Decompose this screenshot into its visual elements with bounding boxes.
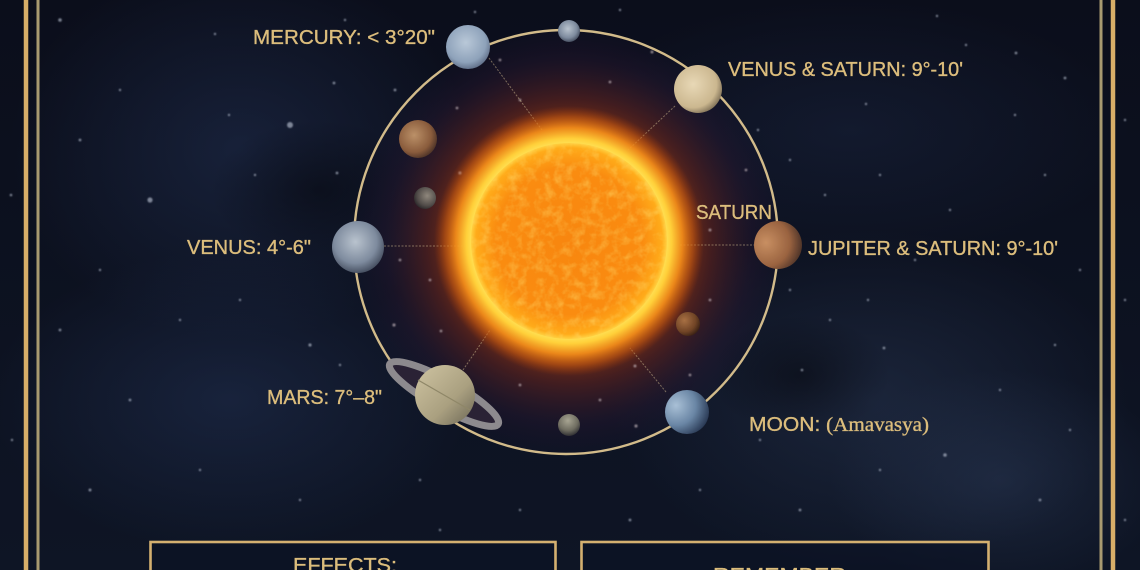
label: Moon: MOON: (Amavasya) — [749, 414, 929, 436]
planet: Mercury — [446, 25, 490, 69]
inner stars — [392, 50, 747, 428]
label: Venus and Saturn: VENUS & SATURN: 9°-10' — [728, 59, 963, 81]
label: Saturn: SATURN — [696, 202, 772, 224]
planet: Moon — [665, 390, 709, 434]
planets — [332, 20, 802, 436]
planet: Venus and Saturn — [674, 65, 722, 113]
panel: remember — [582, 542, 988, 570]
warm space inside orbit — [354, 30, 778, 454]
label: Venus: VENUS: 4°-6" — [187, 237, 311, 259]
planet: ringed Saturn — [383, 352, 505, 436]
label: Jupiter and Saturn: JUPITER & SATURN: 9°-10' — [808, 238, 1058, 260]
dotted guide lines — [384, 58, 754, 392]
planet: Jupiter and Saturn — [754, 221, 802, 269]
planet: inner copper — [399, 120, 437, 158]
label: Mars: MARS: 7°–8" — [267, 387, 382, 409]
orbit ring — [354, 30, 778, 454]
planet: top small — [558, 20, 580, 42]
planet: inner brown — [676, 312, 700, 336]
sun — [434, 106, 704, 376]
panel: effects — [150, 542, 556, 570]
label: Mercury: MERCURY: < 3°20" — [253, 27, 435, 49]
planet: Venus — [332, 221, 384, 273]
planet: inner grey — [558, 414, 580, 436]
planet: inner dark — [414, 187, 436, 209]
